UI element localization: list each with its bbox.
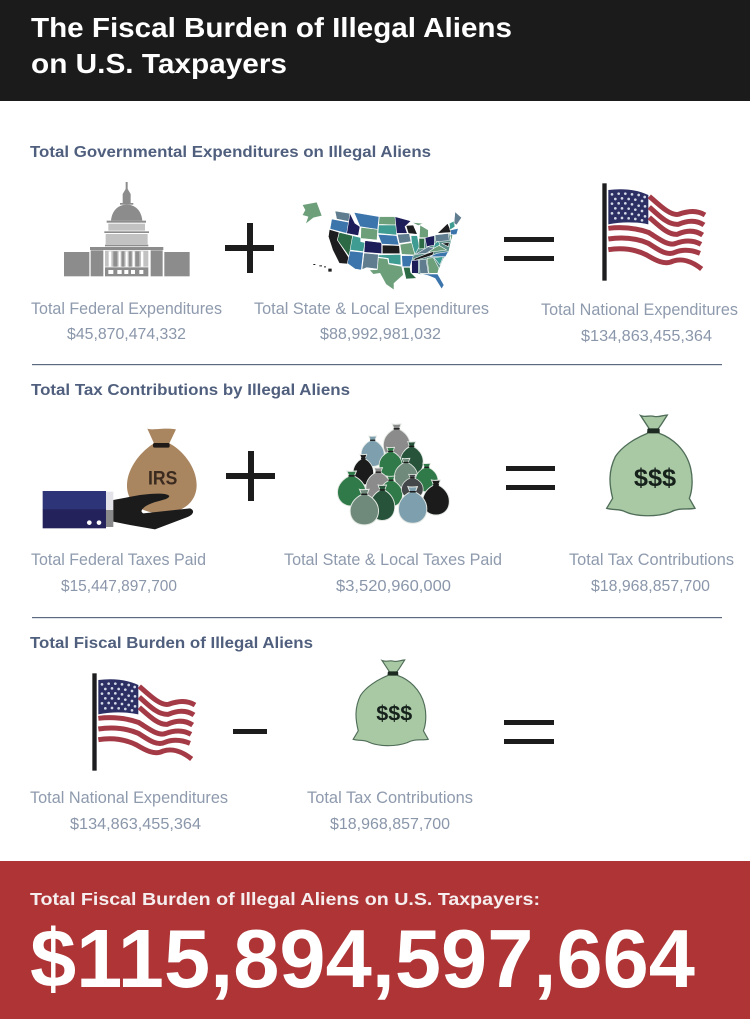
icon: money bag	[607, 415, 695, 516]
icon: american flag	[602, 183, 705, 281]
minus sign	[233, 729, 267, 734]
label: federal taxes: Total Federal Taxes Paid	[31, 551, 206, 569]
title: on U.S. Taxpayers	[31, 48, 287, 79]
label: state and local expenditures: $88,992,981,032	[320, 326, 441, 343]
icon: money bag: $$$	[376, 701, 412, 725]
label: state and local expenditures	[254, 300, 489, 343]
icon: money bag	[353, 660, 428, 746]
panel: expenditures	[30, 144, 738, 345]
heading: fiscal burden: Total Fiscal Burden of Illegal Aliens	[30, 635, 313, 652]
heading: expenditures: Total Governmental Expenditures on Illegal Aliens	[30, 144, 431, 161]
label: federal taxes: $15,447,897,700	[61, 578, 177, 595]
icon: capitol	[64, 182, 190, 276]
equals sign	[504, 237, 554, 261]
label: national expenditures: $134,863,455,364	[581, 328, 712, 345]
label: national expenditures	[541, 301, 738, 345]
equals sign	[506, 466, 555, 490]
icon: american flag	[92, 673, 195, 771]
result band	[0, 861, 750, 1019]
panel: fiscal burden equation	[30, 635, 554, 833]
label: state and local taxes	[284, 551, 502, 595]
label: total tax contributions: $18,968,857,700	[591, 578, 710, 595]
label: national expenditures	[30, 789, 228, 833]
icon: hand holding irs bag: IRS	[148, 469, 177, 490]
result figure: $115,894,597,664	[30, 912, 695, 1005]
label: national expenditures: Total National Expenditures	[541, 301, 738, 319]
label: tax contributions: Total Tax Contributions	[307, 789, 473, 807]
label: federal taxes	[31, 551, 206, 595]
label: federal expenditures	[31, 300, 222, 343]
header band	[0, 0, 750, 101]
panel: tax contributions	[31, 382, 734, 595]
icon: pile of money bags	[337, 424, 449, 525]
label: state and local expenditures: Total State & Local Expenditures	[254, 300, 489, 318]
label: total tax contributions	[569, 551, 734, 595]
label: tax contributions	[307, 789, 473, 833]
label: federal expenditures: Total Federal Expenditures	[31, 300, 222, 318]
label: national expenditures: $134,863,455,364	[70, 816, 201, 833]
title: The Fiscal Burden of Illegal Aliens	[31, 12, 512, 43]
heading: tax contributions: Total Tax Contributions by Illegal Aliens	[31, 382, 350, 399]
plus sign	[226, 451, 275, 501]
label: national expenditures: Total National Expenditures	[30, 789, 228, 807]
icon: hand holding irs bag	[43, 429, 197, 529]
label: state and local taxes: Total State & Local Taxes Paid	[284, 551, 502, 569]
icon: money bag: $$$	[634, 464, 676, 492]
title	[31, 12, 512, 79]
label: tax contributions: $18,968,857,700	[330, 816, 450, 833]
result caption: Total Fiscal Burden of Illegal Aliens on U.S. Taxpayers:	[30, 889, 540, 909]
plus sign	[225, 223, 274, 273]
icon: us map	[303, 202, 462, 290]
label: total tax contributions: Total Tax Contributions	[569, 551, 734, 569]
label: state and local taxes: $3,520,960,000	[336, 578, 451, 595]
label: federal expenditures: $45,870,474,332	[67, 326, 186, 343]
equals sign	[504, 720, 554, 744]
